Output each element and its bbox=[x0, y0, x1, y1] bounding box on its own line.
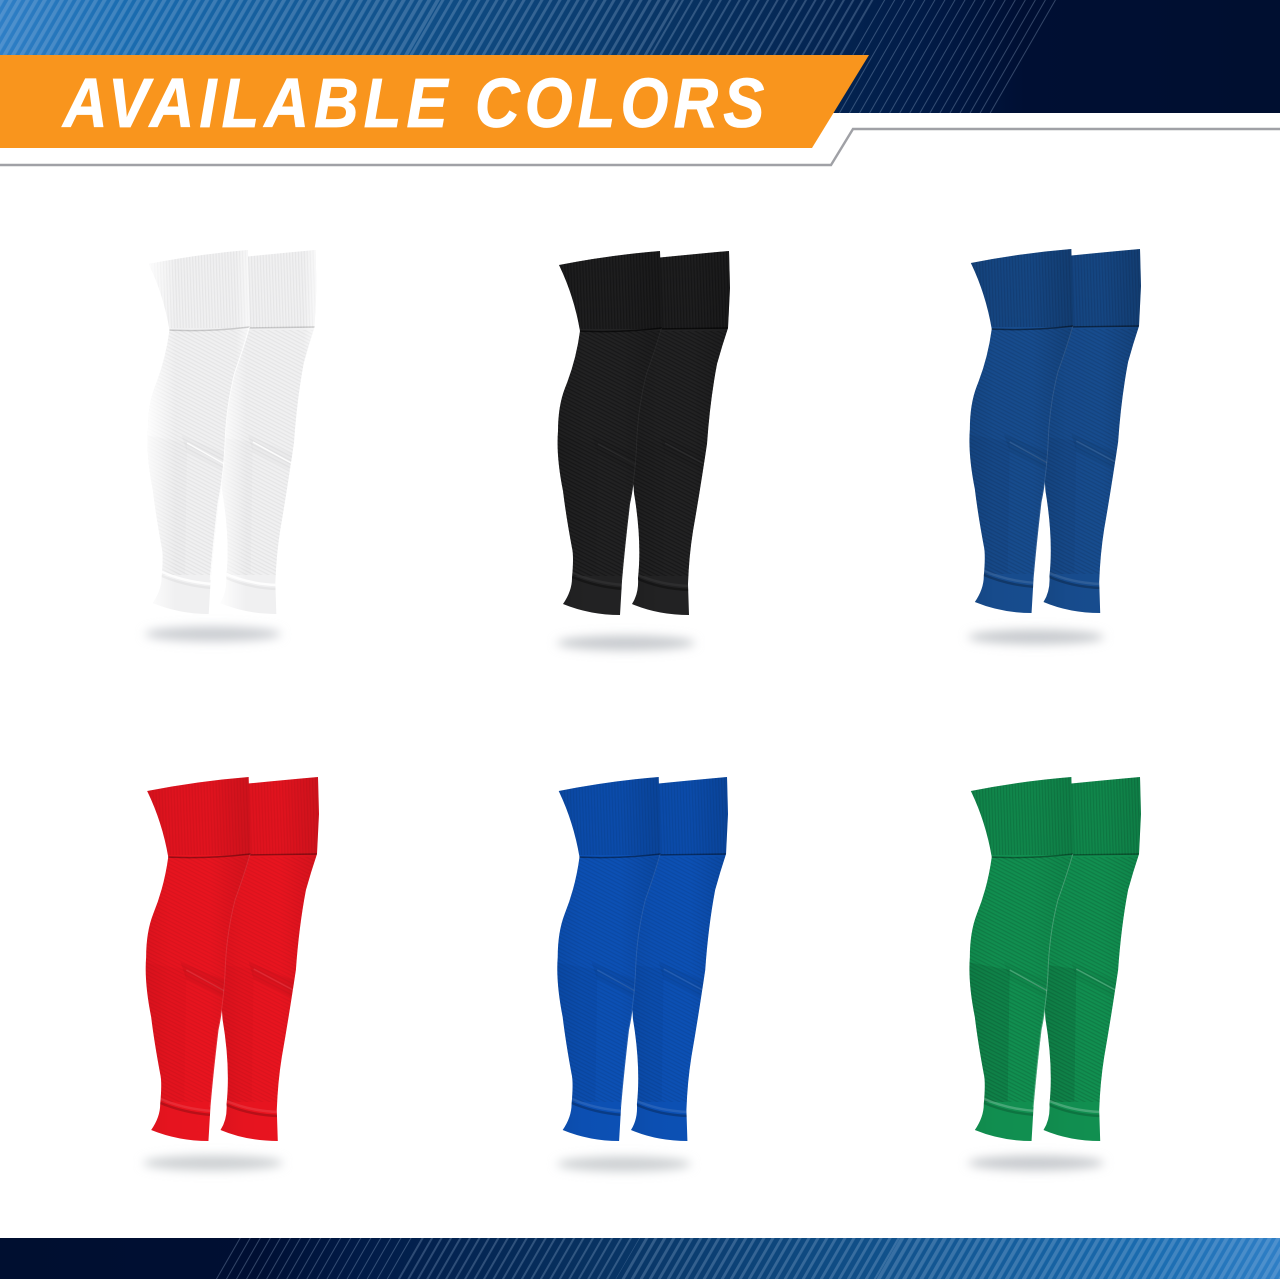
sleeve pair bbox=[118, 757, 329, 1157]
product: royal blue leg sleeves bbox=[530, 757, 738, 1172]
shadow bbox=[968, 630, 1104, 644]
sleeve pair bbox=[942, 229, 1151, 629]
shadow bbox=[145, 626, 281, 642]
product: red leg sleeves bbox=[118, 757, 329, 1170]
product: black leg sleeves bbox=[530, 231, 740, 650]
product: green leg sleeves bbox=[942, 757, 1151, 1170]
sleeve pair bbox=[530, 757, 738, 1157]
shadow bbox=[557, 636, 695, 650]
title: AVAILABLE COLORS bbox=[61, 63, 764, 142]
orange title banner bbox=[0, 55, 869, 148]
product: white leg sleeves bbox=[120, 230, 326, 642]
shadow bbox=[143, 1156, 283, 1170]
shadow bbox=[968, 1156, 1104, 1170]
sleeve pair bbox=[120, 230, 326, 630]
sleeve pair bbox=[530, 231, 740, 631]
product: navy leg sleeves bbox=[942, 229, 1151, 644]
shadow bbox=[557, 1156, 691, 1172]
header band bbox=[0, 0, 1280, 113]
header white cut-out with grey rule bbox=[0, 113, 1280, 165]
sleeve pair bbox=[942, 757, 1151, 1157]
footer band bbox=[0, 1238, 1280, 1279]
